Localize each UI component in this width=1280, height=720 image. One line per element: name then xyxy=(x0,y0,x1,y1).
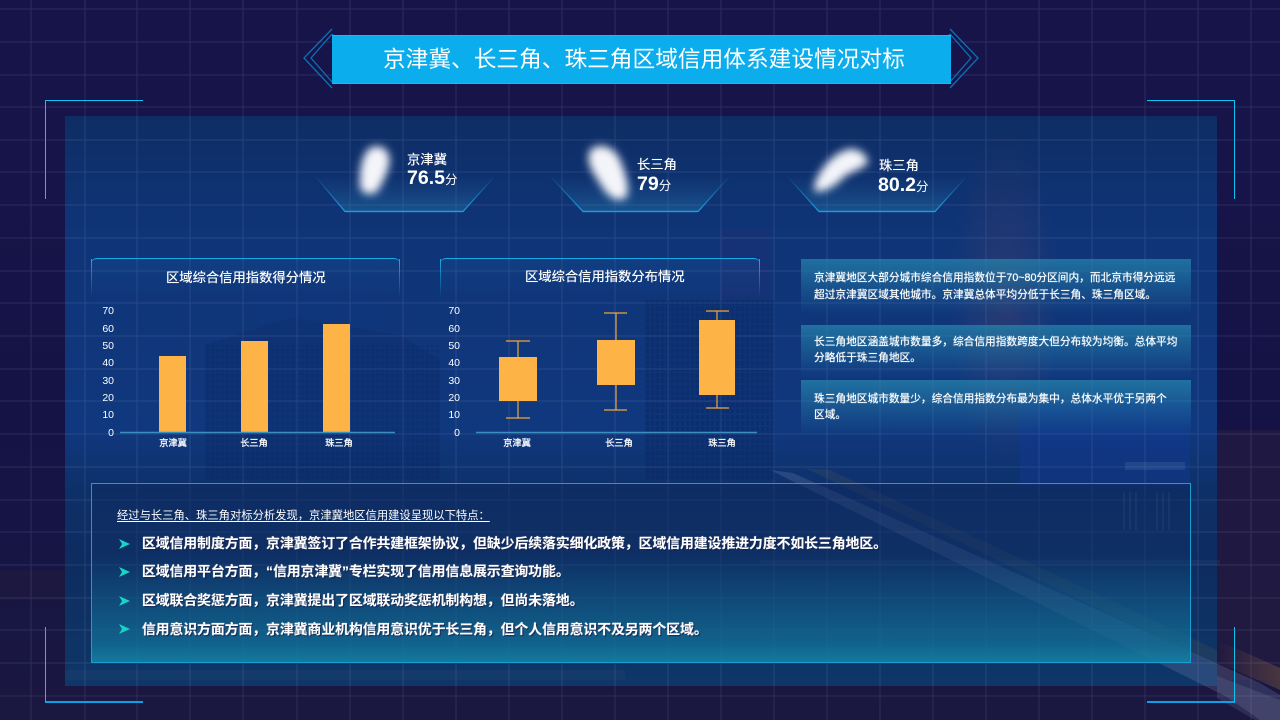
box plot: regional score distribution: 20 xyxy=(448,392,460,404)
map icon: Jing-Jin-Ji xyxy=(352,140,396,201)
main translucent panel xyxy=(65,116,1217,686)
finding 3 xyxy=(119,592,584,608)
corner bracket: bottom left xyxy=(45,627,143,703)
finding text: 信用意识方面方面，京津冀商业机构信用意识优于长三角，但个人信用意识不及另两个区域。 xyxy=(142,622,708,637)
score pedestal xyxy=(552,178,728,212)
chart header: distribution xyxy=(440,258,760,298)
title bar xyxy=(332,35,951,84)
chart header: score xyxy=(91,258,400,298)
finding text: 区域联合奖惩方面，京津冀提出了区域联动奖惩机制构想，但尚未落地。 xyxy=(142,593,584,608)
label: 京津冀 xyxy=(407,152,447,167)
card text: 长三角地区涵盖城市数量多，综合信用指数跨度大但分布较为均衡。总体平均 xyxy=(814,336,1177,348)
finding 2 xyxy=(119,564,570,579)
bar chart: regional composite score: 50 xyxy=(102,340,114,352)
card text xyxy=(814,271,1176,301)
bullet arrow xyxy=(119,624,130,634)
label: 珠三角 xyxy=(879,158,919,173)
box plot: regional score distribution: 40 xyxy=(448,357,460,369)
card text xyxy=(814,392,1167,421)
score: 76.5分 xyxy=(407,167,457,189)
bar chart: regional composite score: 60 xyxy=(102,323,114,335)
box plot: regional score distribution: 50 xyxy=(448,340,460,352)
bullet arrow xyxy=(119,567,130,577)
bar chart: regional composite score: 0 xyxy=(108,427,114,439)
box plot: regional score distribution: 0 xyxy=(454,427,460,439)
card text: 分略低于珠三角地区。 xyxy=(814,352,921,364)
box plot: regional score distribution: 60 xyxy=(448,323,460,335)
bullet arrow xyxy=(119,539,130,549)
score block: Pearl Delta xyxy=(789,142,965,212)
bar chart: regional composite score: 珠三角 xyxy=(325,437,353,448)
box plot: regional score distribution: 10 xyxy=(448,409,460,421)
title text: 京津冀、长三角、珠三角区域信用体系建设情况对标 xyxy=(383,46,905,72)
finding text: 区域信用平台方面，“信用京津冀”专栏实现了信用信息展示查询功能。 xyxy=(142,564,570,579)
box plot: regional score distribution: 珠三角 xyxy=(708,437,736,448)
text card: Yangtze Delta xyxy=(801,325,1191,377)
title diamonds decoration xyxy=(303,28,979,88)
findings intro: 经过与长三角、珠三角对标分析发现，京津冀地区信用建设呈现以下特点： xyxy=(117,510,490,522)
card text: 珠三角地区城市数量少，综合信用指数分布最为集中，总体水平优于另两个 xyxy=(814,393,1167,405)
bar chart: regional composite score: 40 xyxy=(102,357,114,369)
text card: Pearl Delta xyxy=(801,380,1191,434)
bar chart: regional composite score: 20 xyxy=(102,392,114,404)
score: 79分 xyxy=(637,173,671,195)
card text: 京津冀地区大部分城市综合信用指数位于70~80分区间内，而北京市得分远远 xyxy=(814,272,1175,284)
bar chart: regional composite score: 长三角 xyxy=(240,437,268,448)
score block: Jing-Jin-Ji xyxy=(317,140,493,212)
corner bracket: top right xyxy=(1147,100,1235,199)
bar chart: regional composite score: 京津冀 xyxy=(159,437,187,448)
chart title: 区域综合信用指数分布情况 xyxy=(525,269,685,284)
finding text: 区域信用制度方面，京津冀签订了合作共建框架协议，但缺少后续落实细化政策，区域信用建设推进力度不如长三角地区。 xyxy=(142,536,887,551)
card text: 超过京津冀区域其他城市。京津冀总体平均分低于长三角、珠三角区域。 xyxy=(814,289,1156,301)
corner bracket: top left xyxy=(45,100,143,199)
findings panel xyxy=(91,483,1191,663)
text card: Jing-Jin-Ji xyxy=(801,259,1191,313)
bar chart: regional composite score: 70 xyxy=(102,305,114,317)
bar chart: regional composite score: 30 xyxy=(102,375,114,387)
title banner xyxy=(303,28,979,88)
finding 1 xyxy=(119,536,887,551)
box plot: regional score distribution: 70 xyxy=(448,305,460,317)
bullet arrow xyxy=(119,596,130,606)
finding 4 xyxy=(119,622,708,638)
label: 长三角 xyxy=(637,157,677,172)
score block: Yangtze Delta xyxy=(552,139,728,212)
bar chart: regional composite score: 10 xyxy=(102,409,114,421)
map icon: Pearl Delta xyxy=(808,142,874,198)
score pedestal xyxy=(317,178,493,212)
chart title: 区域综合信用指数得分情况 xyxy=(166,270,326,285)
score: 80.2分 xyxy=(878,174,928,196)
score pedestal xyxy=(789,178,965,212)
map icon: Yangtze Delta xyxy=(582,139,635,206)
card text xyxy=(814,335,1178,364)
corner bracket: bottom right xyxy=(1147,627,1235,703)
box plot: regional score distribution: 长三角 xyxy=(605,437,633,448)
box plot: regional score distribution: 京津冀 xyxy=(503,437,531,448)
card text: 区域。 xyxy=(814,409,846,421)
box plot: regional score distribution: 30 xyxy=(448,375,460,387)
